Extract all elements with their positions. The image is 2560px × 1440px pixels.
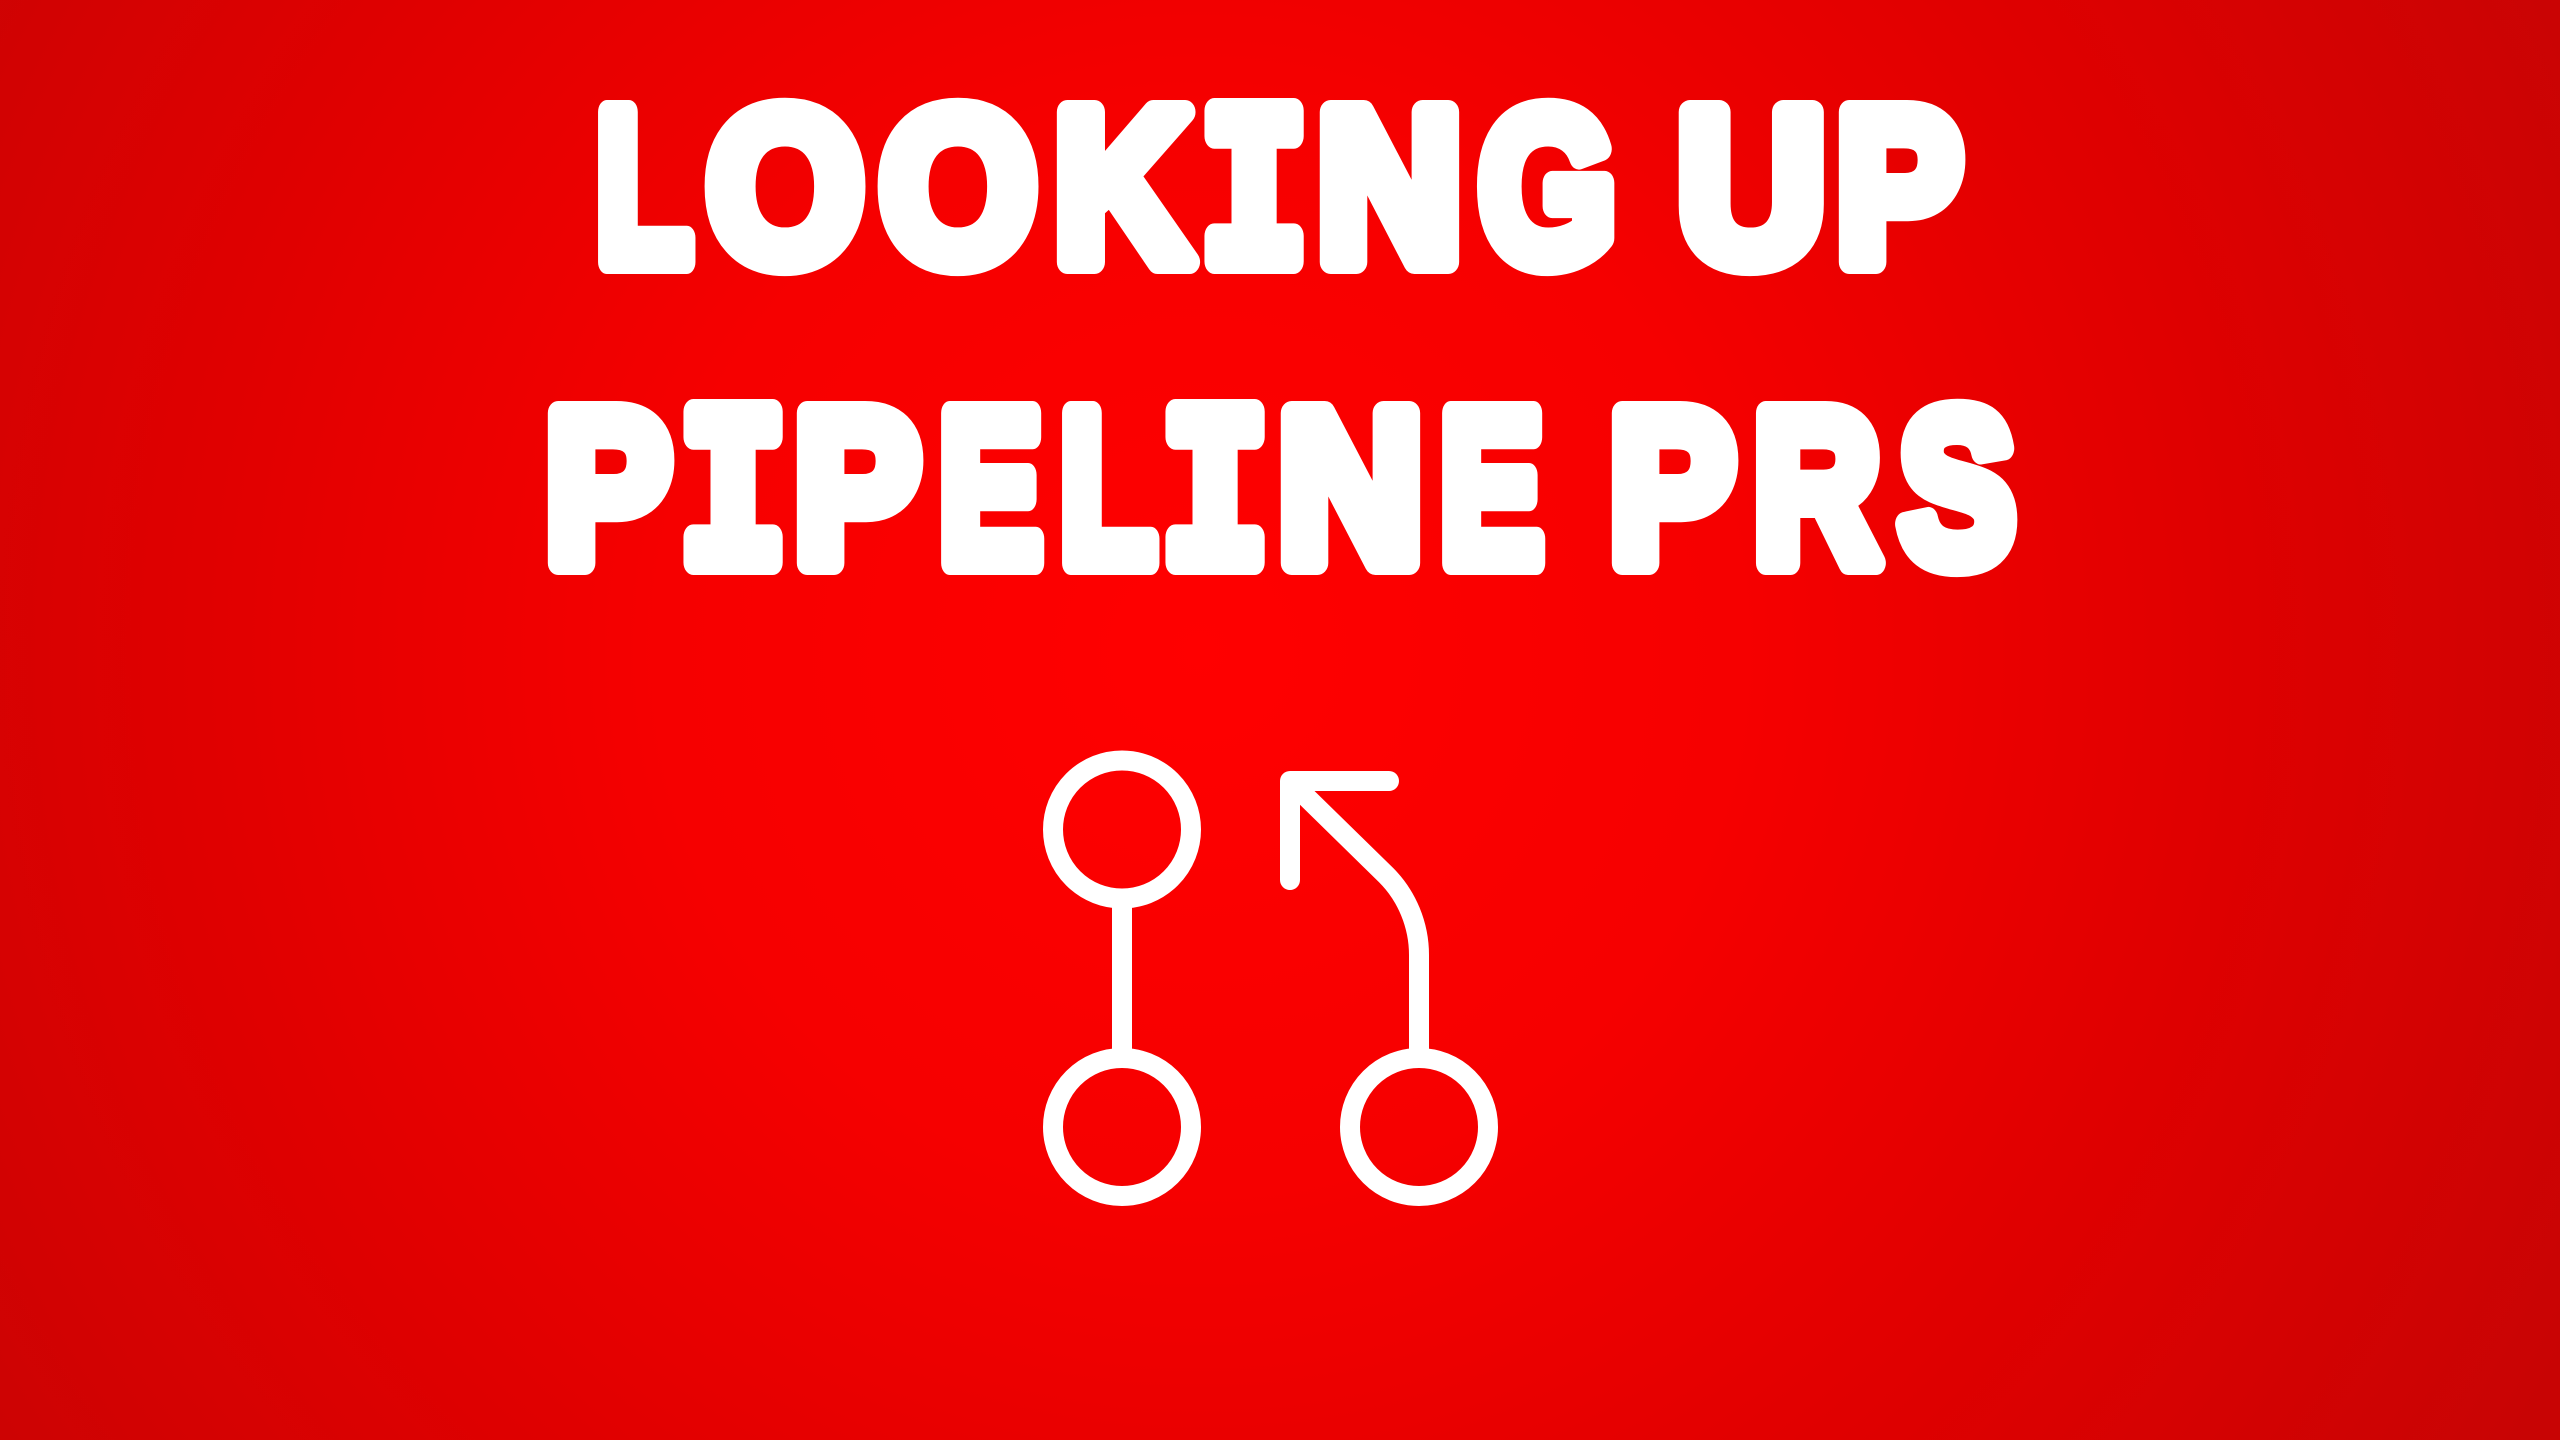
title line 2: PIPELINE PRS: P (1610, 367, 1735, 610)
icon: curved return path (1290, 781, 1419, 1058)
title line 2: PIPELINE PRS: I (680, 372, 786, 632)
title line 1: LOOKING UP: K (1055, 66, 1191, 309)
icon: pull request (1053, 760, 1488, 1196)
title line 1: LOOKING UP: I (1201, 71, 1307, 331)
icon: connector line (1112, 898, 1132, 1058)
title line 1: LOOKING UP: U (1678, 65, 1825, 308)
icon: top-left node (1053, 760, 1191, 898)
title line 1: LOOKING UP: O (880, 66, 1036, 309)
icon: bottom-left node (1053, 1058, 1191, 1196)
icon: bottom-right node (1350, 1058, 1488, 1196)
title (546, 65, 2015, 632)
title line 2: PIPELINE PRS: I (1162, 372, 1268, 632)
title line 2: PIPELINE PRS: S (1900, 366, 2015, 610)
title line 2: PIPELINE PRS: E (939, 365, 1042, 609)
title line 2: PIPELINE PRS: P (795, 367, 920, 610)
title line 2: PIPELINE PRS: N (1278, 367, 1423, 610)
title line 1: LOOKING UP (596, 65, 1962, 331)
title line 2: PIPELINE PRS: L (1060, 366, 1156, 610)
title line 2: PIPELINE PRS: P (546, 367, 671, 610)
title line 1: LOOKING UP: N (1317, 66, 1462, 309)
icon: arrow head (1290, 781, 1389, 880)
title line 2: PIPELINE PRS (546, 365, 2015, 632)
title line 2: PIPELINE PRS: R (1754, 365, 1880, 609)
title line 1: LOOKING UP: G (1479, 65, 1616, 308)
title line 1: LOOKING UP: P (1837, 66, 1962, 309)
title line 1: LOOKING UP: L (596, 65, 692, 309)
title line 2: PIPELINE PRS: E (1440, 365, 1543, 609)
title line 1: LOOKING UP: O (707, 66, 863, 309)
